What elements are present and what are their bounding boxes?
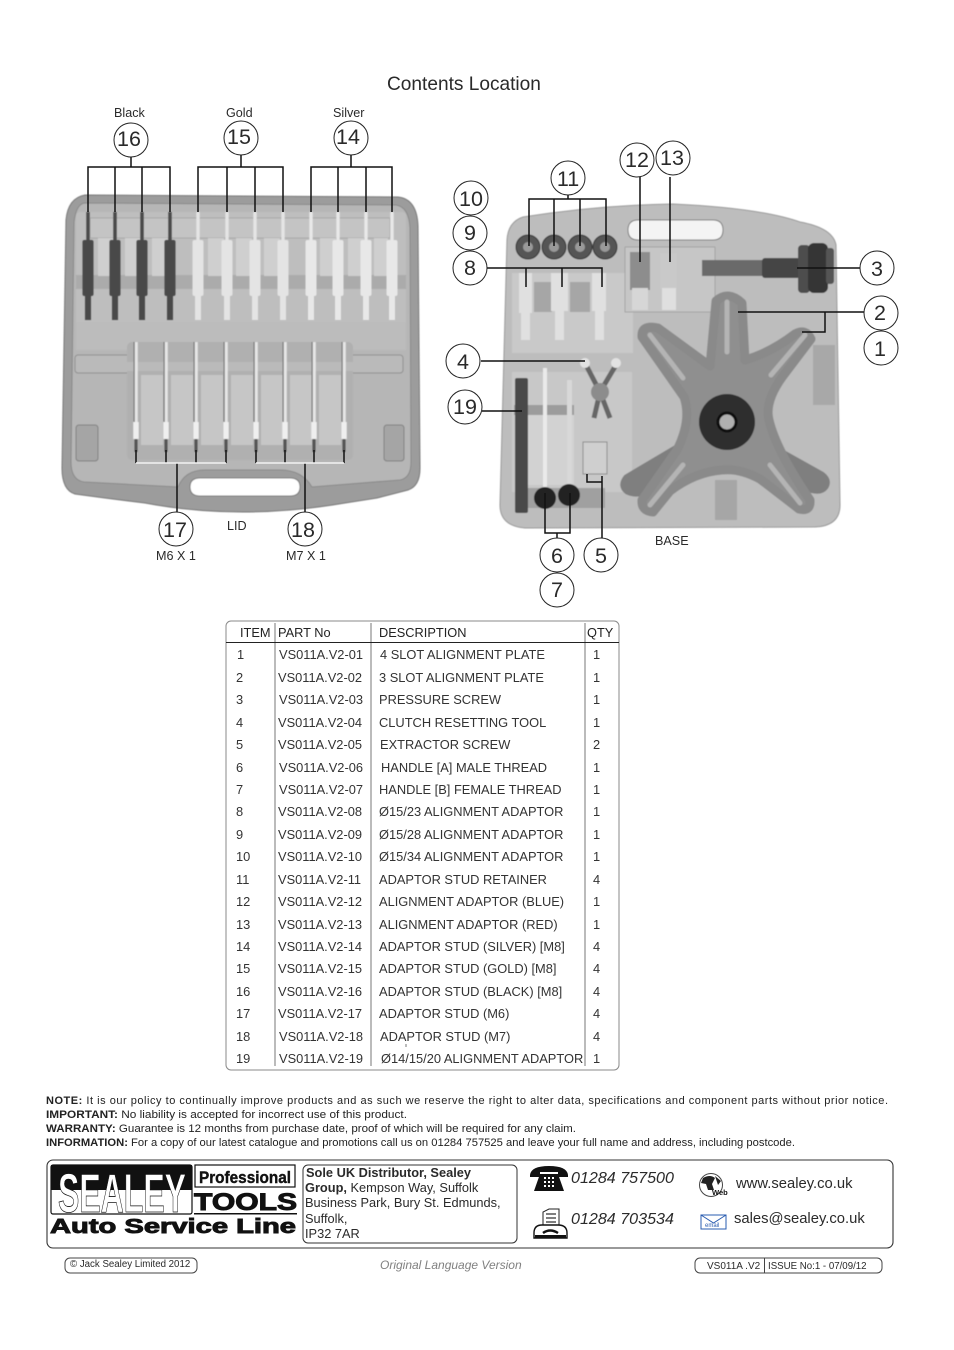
issue box: VS011A .V2	[707, 1261, 761, 1272]
callout numbers: 6	[551, 544, 563, 568]
handles	[534, 368, 580, 509]
table rows: 17	[236, 1006, 250, 1021]
table rows: 6	[236, 760, 243, 775]
extractor screws	[583, 442, 607, 474]
callout numbers: 17	[163, 518, 187, 542]
table rows: VS011A.V2-01	[279, 647, 363, 662]
table rows: 16	[236, 984, 250, 999]
distributor address: Sole UK Distributor, Sealey	[306, 1165, 472, 1180]
language note: Original Language Version	[380, 1258, 522, 1272]
lid leader lines	[88, 155, 392, 512]
table rows: HANDLE [A] MALE THREAD	[381, 760, 547, 775]
table header: ITEM	[240, 625, 271, 640]
table rows: VS011A.V2-15	[278, 961, 362, 976]
table rows: 4	[593, 1006, 600, 1021]
footer contact panel	[47, 1160, 893, 1248]
table rows: VS011A.V2-18	[279, 1029, 363, 1044]
alignment plate	[642, 296, 811, 512]
lower alignment plate	[623, 445, 827, 494]
table rows: 4 SLOT ALIGNMENT PLATE	[380, 647, 545, 662]
Sealey logo: Professional	[199, 1168, 291, 1187]
table rows: VS011A.V2-11	[278, 872, 361, 887]
Sealey logo: SEALEY	[58, 1162, 186, 1224]
table rows: 14	[236, 939, 250, 954]
photo labels: LID	[227, 519, 247, 533]
table rows: 1	[593, 670, 600, 685]
table rows: VS011A.V2-03	[279, 692, 363, 707]
black studs	[82, 212, 176, 320]
table rows: VS011A.V2-05	[278, 737, 362, 752]
icon: web globe	[700, 1174, 728, 1197]
table rows: ADAPTOR STUD (M6)	[379, 1006, 509, 1021]
Sealey logo: Auto Service Line	[50, 1216, 296, 1238]
table rows: VS011A.V2-02	[278, 670, 362, 685]
distributor address	[303, 1165, 517, 1243]
lower pins	[133, 342, 347, 452]
table rows: ADAPTOR STUD (GOLD) [M8]	[379, 961, 556, 976]
table rows: 1	[237, 647, 244, 662]
table header: PART No	[278, 625, 331, 640]
table rows: 1	[593, 827, 600, 842]
photo labels	[114, 106, 689, 563]
table rows: 1	[593, 760, 600, 775]
copyright box: © Jack Sealey Limited 2012	[70, 1259, 190, 1270]
callout numbers: 7	[551, 578, 563, 602]
table rows: VS011A.V2-06	[279, 760, 363, 775]
table rows: Ø15/34 ALIGNMENT ADAPTOR	[379, 849, 563, 864]
distributor address: Business Park, Bury St. Edmunds,	[305, 1195, 501, 1210]
table header: DESCRIPTION	[379, 625, 466, 640]
table rows: 4	[593, 939, 600, 954]
table rows: 1	[593, 1051, 600, 1066]
table rows: 11	[236, 872, 249, 887]
icon: telephone	[530, 1166, 568, 1191]
callout numbers: 13	[660, 146, 684, 170]
table rows: VS011A.V2-13	[278, 917, 362, 932]
table rows: 1	[593, 894, 600, 909]
table rows: 1	[593, 647, 600, 662]
photo labels: M7 X 1	[286, 549, 326, 563]
table rows: 8	[236, 804, 243, 819]
callout numbers: 15	[227, 125, 251, 149]
table rows: 9	[236, 827, 243, 842]
callout numbers: 3	[871, 257, 883, 281]
table rows: 2	[593, 737, 600, 752]
callout numbers: 12	[625, 148, 649, 172]
table rows: 4	[593, 961, 600, 976]
photo labels: Gold	[226, 106, 253, 120]
callout numbers: 10	[459, 187, 483, 211]
table rows: ALIGNMENT ADAPTOR (RED)	[379, 917, 558, 932]
table rows: ADAPTOR STUD (BLACK) [M8]	[379, 984, 562, 999]
callout numbers: 5	[595, 544, 607, 568]
distributor address: Group, Kempson Way, Suffolk	[305, 1180, 479, 1195]
callout numbers: 9	[464, 221, 476, 245]
notes: INFORMATION: For a copy of our latest catalogue and promotions call us on 01284 757525 and leave your full name and address, including postcode.	[46, 1137, 795, 1149]
phone number: 01284 757500	[571, 1169, 674, 1187]
retainer centres	[523, 242, 610, 252]
Sealey logo: TOOLS	[194, 1189, 297, 1216]
table rows: Ø15/28 ALIGNMENT ADAPTOR	[379, 827, 563, 842]
notes: NOTE: It is our policy to continually improve products and as such we reserve the right to alter data, specifications and component parts without prior notice.	[46, 1095, 888, 1107]
table rows: 1	[593, 849, 600, 864]
plate hub	[699, 394, 755, 450]
table rows: 3 SLOT ALIGNMENT PLATE	[379, 670, 544, 685]
fax number: 01284 703534	[571, 1210, 674, 1228]
table rows: 3	[236, 692, 243, 707]
table frame	[226, 621, 619, 1070]
alignment adaptor 19	[515, 378, 528, 513]
alignment adaptors	[519, 273, 606, 340]
table rows: 1	[593, 715, 600, 730]
table rows: ADAPTOR STUD RETAINER	[379, 872, 547, 887]
table rows: 4	[593, 984, 600, 999]
photo labels: BASE	[655, 534, 689, 548]
photo labels: M6 X 1	[156, 549, 196, 563]
icon: email envelope	[701, 1215, 726, 1229]
notes	[46, 1095, 888, 1149]
table rows: 19	[236, 1051, 250, 1066]
callout numbers: 1	[874, 337, 886, 361]
table rows: 1	[593, 782, 600, 797]
photo labels: Silver	[333, 106, 364, 120]
table rows: Ø15/23 ALIGNMENT ADAPTOR	[379, 804, 563, 819]
table rows: VS011A.V2-14	[278, 939, 362, 954]
table rows: EXTRACTOR SCREW	[380, 737, 511, 752]
parts table	[226, 621, 619, 1070]
plate slots	[650, 302, 805, 505]
pressure screw	[702, 243, 834, 293]
table header: QTY	[587, 625, 614, 640]
distributor address: IP32 7AR	[305, 1226, 360, 1241]
table rows: ADAPTOR STUD (M7)	[380, 1029, 510, 1044]
table rows: VS011A.V2-17	[278, 1006, 362, 1021]
title: Contents Location	[387, 74, 541, 95]
callout numbers	[114, 121, 898, 607]
table rows: 18	[236, 1029, 250, 1044]
table rows: 2	[236, 670, 243, 685]
table rows: VS011A.V2-10	[278, 849, 362, 864]
adaptors 12 and 13	[630, 252, 677, 310]
issue box	[695, 1258, 882, 1273]
table rows: ADAPTOR STUD (SILVER) [M8]	[379, 939, 565, 954]
gold studs	[192, 212, 288, 320]
clutch resetting tool	[580, 358, 621, 418]
table rows: VS011A.V2-19	[279, 1051, 363, 1066]
icon: web globe: Web	[712, 1188, 728, 1197]
icon: fax	[534, 1209, 567, 1238]
callout numbers: 16	[117, 127, 141, 151]
table rows: VS011A.V2-04	[278, 715, 362, 730]
table rows: VS011A.V2-08	[278, 804, 362, 819]
silver studs	[306, 212, 398, 320]
base leader lines	[481, 177, 865, 538]
table rows: 13	[236, 917, 250, 932]
stud retainers	[516, 235, 617, 259]
table rows: 1	[593, 692, 600, 707]
callout numbers: 2	[874, 301, 886, 325]
panel: base photo	[500, 204, 840, 528]
callout numbers: 11	[557, 167, 579, 191]
table rows: 12	[236, 894, 250, 909]
table rows: VS011A.V2-07	[279, 782, 363, 797]
table rows: VS011A.V2-16	[278, 984, 362, 999]
icon: email envelope: email	[705, 1223, 719, 1229]
table rows: VS011A.V2-09	[278, 827, 362, 842]
callout numbers: 4	[457, 350, 469, 374]
table rows: 10	[236, 849, 250, 864]
notes: WARRANTY: Guarantee is 12 months from purchase date, proof of which will be required for any claim.	[46, 1123, 576, 1135]
table rows: 4	[236, 715, 243, 730]
copyright box	[65, 1258, 197, 1273]
table rows	[236, 647, 600, 1066]
email address: sales@sealey.co.uk	[734, 1211, 865, 1227]
table header	[240, 625, 614, 640]
base case	[500, 204, 840, 528]
notes: IMPORTANT: No liability is accepted for incorrect use of this product.	[46, 1109, 407, 1121]
callout numbers: 14	[336, 125, 360, 149]
table rows: HANDLE [B] FEMALE THREAD	[379, 782, 561, 797]
callout numbers: 19	[453, 395, 477, 419]
distributor address: Suffolk,	[305, 1211, 347, 1226]
lid case	[62, 195, 420, 512]
table rows: ALIGNMENT ADAPTOR (BLUE)	[379, 894, 564, 909]
table rows: 1	[593, 917, 600, 932]
website: www.sealey.co.uk	[735, 1176, 853, 1192]
table rows: 4	[593, 1029, 600, 1044]
panel: lid photo	[62, 195, 420, 512]
table rows: Ø14/15/20 ALIGNMENT ADAPTOR	[381, 1051, 583, 1066]
callout numbers: 8	[464, 256, 476, 280]
table rows: 15	[236, 961, 250, 976]
table rows: CLUTCH RESETTING TOOL	[379, 715, 546, 730]
photo labels: Black	[114, 106, 145, 120]
table rows: VS011A.V2-12	[278, 894, 362, 909]
table rows: 5	[236, 737, 243, 752]
callout numbers: 18	[291, 518, 315, 542]
table rows: 7	[236, 782, 243, 797]
table rows: PRESSURE SCREW	[379, 692, 502, 707]
table rows: 4	[593, 872, 600, 887]
issue box: ISSUE No:1 - 07/09/12	[768, 1261, 867, 1272]
table rows: 1	[593, 804, 600, 819]
